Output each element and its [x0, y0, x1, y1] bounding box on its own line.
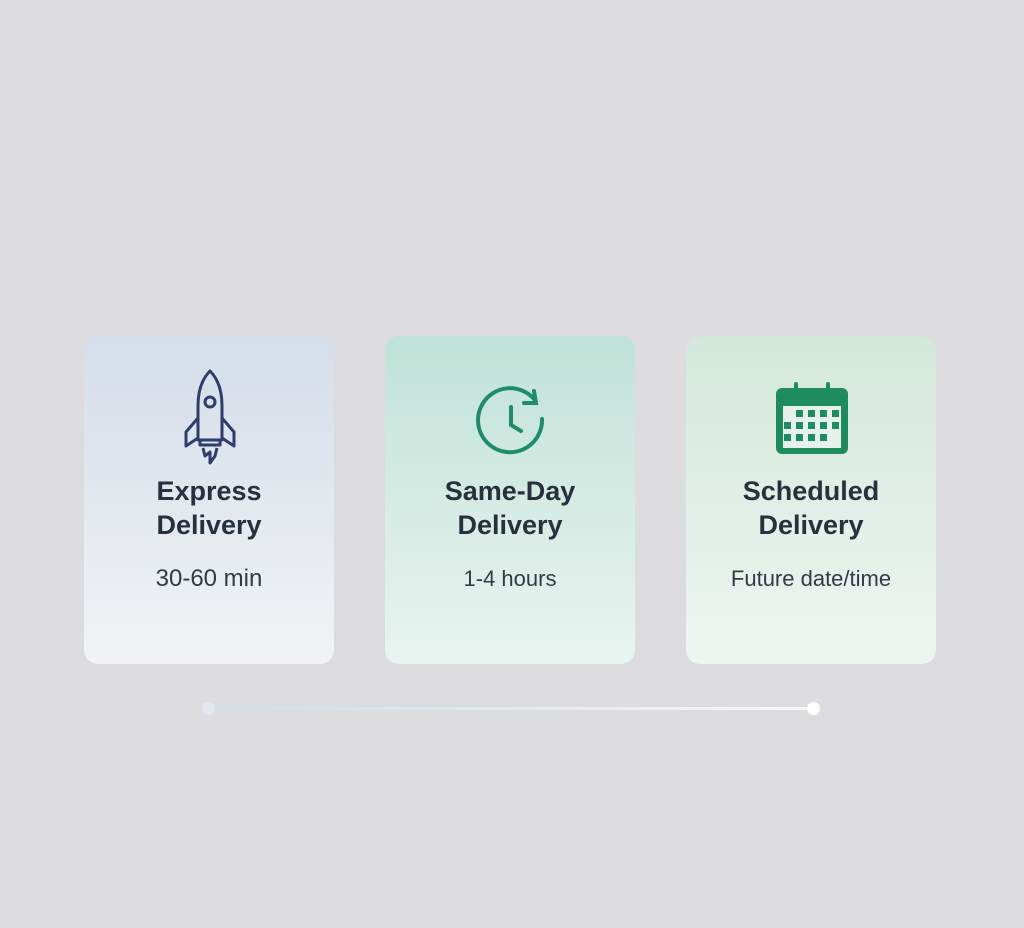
- timeline: [202, 702, 820, 715]
- panel: scheduled: [686, 336, 936, 664]
- heading: express: [156, 476, 262, 540]
- text: scheduled time: Future date/time: [731, 566, 891, 591]
- heading: same-day: Delivery: [457, 510, 563, 540]
- heading: scheduled: Delivery: [758, 510, 864, 540]
- heading: scheduled: [743, 476, 879, 540]
- icon: calendar: [776, 382, 848, 454]
- panel: same-day: [385, 336, 635, 664]
- heading: express: Express: [156, 476, 262, 506]
- heading: scheduled: Scheduled: [743, 476, 879, 506]
- heading: express: Delivery: [156, 510, 262, 540]
- icon: clock: [476, 386, 544, 454]
- heading: same-day: Same-Day: [445, 476, 575, 506]
- panel: express: [84, 336, 334, 664]
- icon: rocket: [184, 369, 236, 464]
- text: express time: 30-60 min: [156, 565, 262, 592]
- text: same-day time: 1-4 hours: [464, 566, 556, 591]
- heading: same-day: [445, 476, 576, 540]
